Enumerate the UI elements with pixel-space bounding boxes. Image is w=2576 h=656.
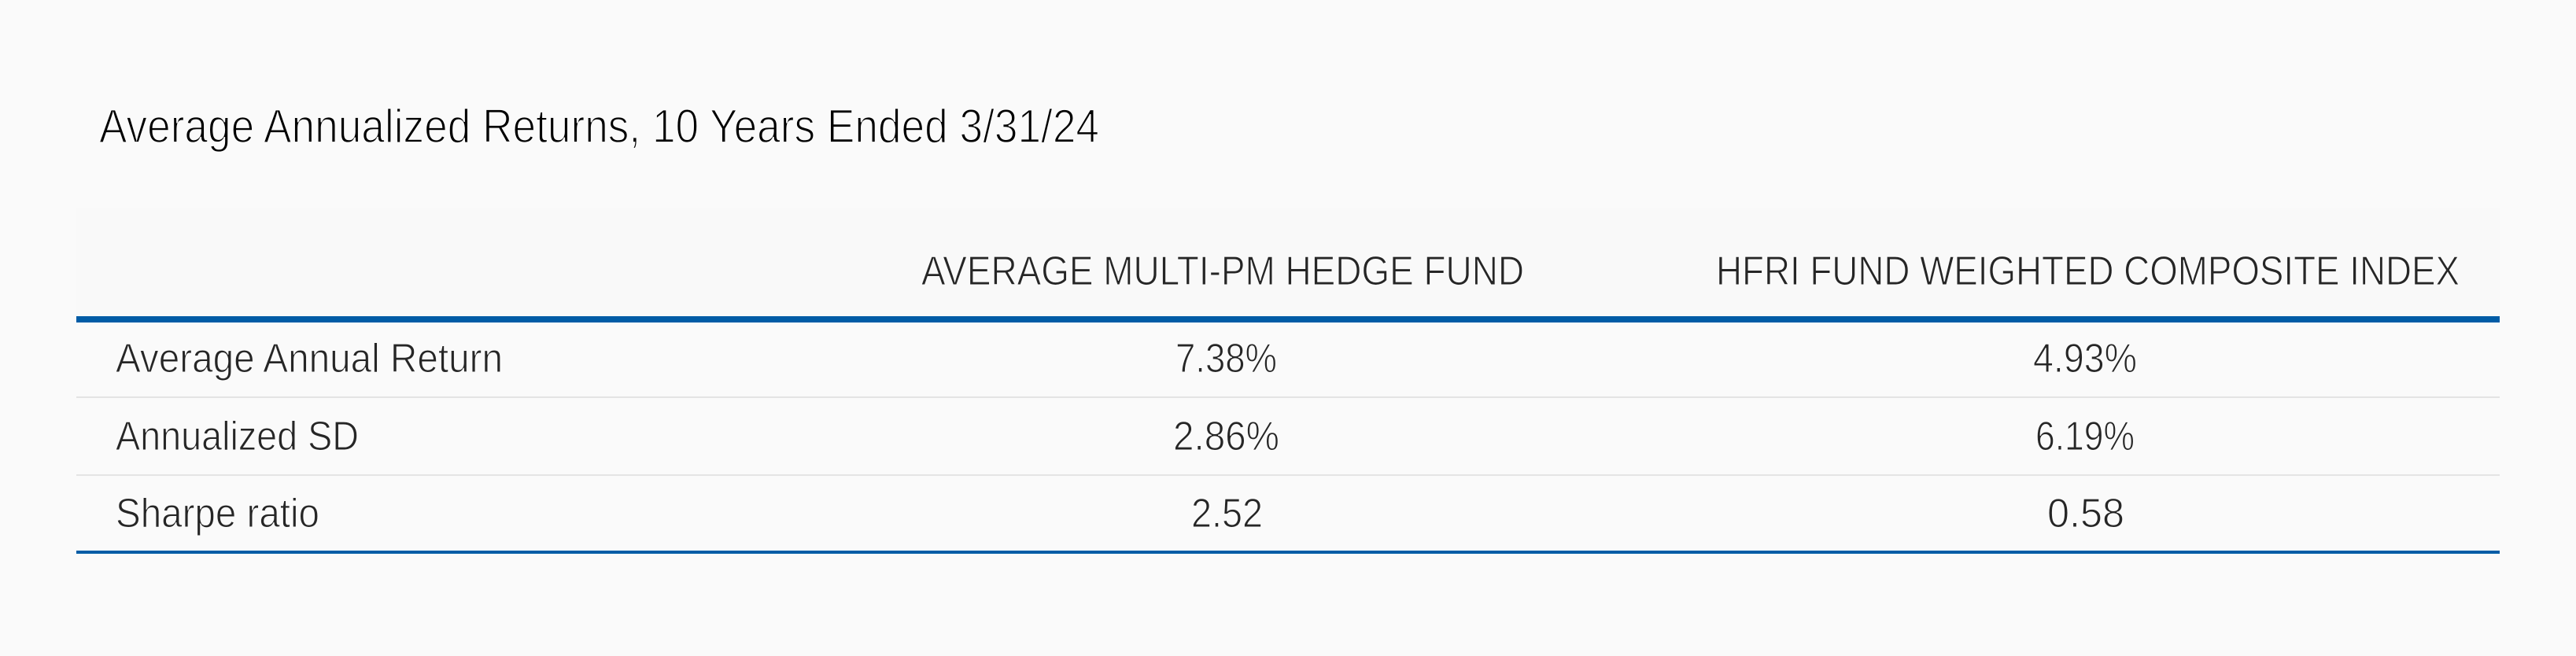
- row: annualized SD: [116, 414, 2135, 459]
- title: Average Annualized Returns, 10 Years Ended 3/31/24: [99, 100, 1099, 153]
- row: Sharpe ratio: Sharpe ratio: [116, 491, 319, 536]
- table header band: [76, 208, 2500, 316]
- row: Sharpe ratio: [116, 491, 2124, 536]
- column heading: HFRI index: HFRI FUND WEIGHTED COMPOSITE INDEX: [1716, 249, 2460, 294]
- row: annualized SD: 6.19%: [2035, 414, 2135, 459]
- row: average annual return: [116, 336, 2137, 381]
- column heading: average multi-PM hedge fund: AVERAGE MULTI-PM HEDGE FUND: [921, 249, 1524, 294]
- row: Sharpe ratio: 2.52: [1191, 491, 1263, 536]
- row: annualized SD: 2.86%: [1173, 414, 1279, 459]
- row: annualized SD: Annualized SD: [116, 414, 359, 459]
- row: average annual return: Average Annual Return: [116, 336, 503, 381]
- panel: returns table: [76, 208, 2500, 554]
- row: average annual return: 4.93%: [2033, 336, 2137, 381]
- row: Sharpe ratio: 0.58: [2047, 491, 2124, 536]
- row: average annual return: 7.38%: [1175, 336, 1277, 381]
